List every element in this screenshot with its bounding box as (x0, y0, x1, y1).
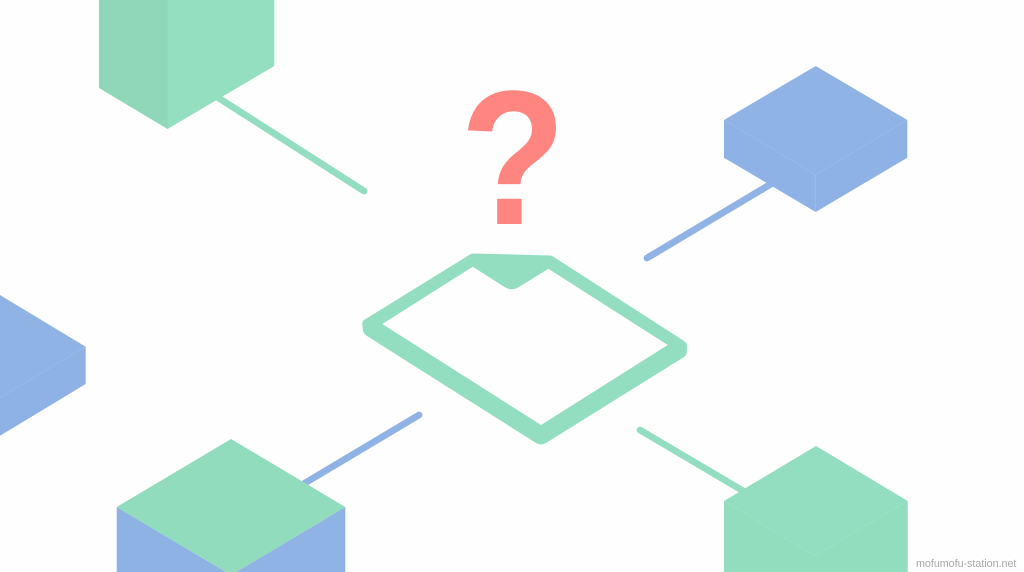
question mark: ? (460, 51, 566, 265)
connector: top-right blue line (647, 181, 776, 258)
watermark: mofumofu-station.net (916, 558, 1016, 570)
block: bottom-left green and blue cube (117, 439, 345, 572)
central tray: green diamond outline with notch (362, 254, 687, 444)
block: top-right blue cube (724, 66, 907, 212)
connector: bottom-right green line (640, 430, 750, 495)
connector: bottom-left blue line (300, 415, 419, 486)
block: top-left green cube (99, 0, 274, 129)
connector: top-left green line (214, 95, 364, 191)
block: left blue cube (0, 295, 86, 436)
block: bottom-right green cube (724, 446, 908, 572)
